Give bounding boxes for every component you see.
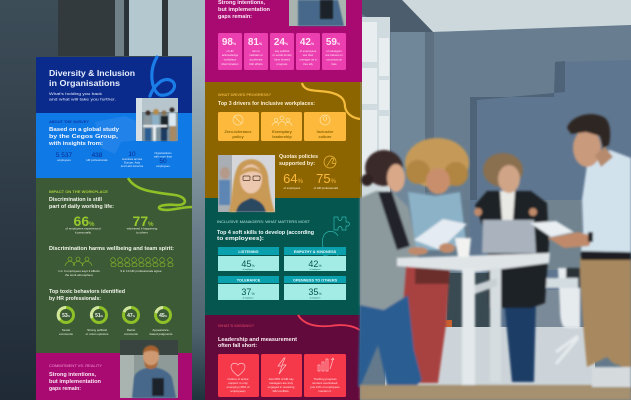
- donut: 53%: 53%: [62, 313, 71, 319]
- skill card: openness to others: OPENNESS TO OTHERS: [293, 278, 338, 282]
- donut: 45%: 45%: [159, 313, 168, 319]
- panel: title header: in Organisations: [49, 78, 120, 88]
- stat card: 98%: [218, 33, 242, 70]
- caption: [58, 269, 100, 277]
- stat: HR professionals: 438: [92, 152, 103, 159]
- donut: 47%: [124, 307, 138, 336]
- stat: HR professionals: [86, 152, 108, 162]
- panel: commitment vs reality, right part: but implementation: [218, 7, 270, 13]
- card: managers resolving conflicts: [261, 354, 302, 397]
- donut: 53%: comments: [59, 332, 73, 336]
- stat: countries: [121, 151, 144, 168]
- donut: 47%: 47%: [127, 313, 136, 319]
- stat: countries: and Latin America: [121, 164, 144, 168]
- section label: COMMITMENT VS. REALITY: [49, 364, 103, 368]
- background photo: dark office wall: [0, 0, 205, 400]
- skill card: tolerance: of employees: [243, 298, 253, 300]
- stat: countries: 10: [128, 151, 136, 158]
- heading: wellbeing: Discrimination harms wellbeing and team spirit:: [49, 246, 174, 252]
- panel: about the survey: with insights from:: [48, 141, 103, 147]
- skill card: listening: 45%: [241, 259, 255, 269]
- section label: IMPACT ON THE WORKPLACE: [49, 190, 109, 194]
- photo: team discussion around standing table: [358, 0, 631, 400]
- stat: 75%: of HR professionals: [314, 186, 339, 190]
- card: tracking progress: remains overlooked:: [312, 381, 338, 385]
- heading: Discrimination is still: [49, 197, 102, 203]
- driver card: exemplary leadership: Exemplary: [272, 129, 293, 134]
- jeans of grey-jacket woman: [358, 295, 422, 387]
- stat card: 42%: manager as a: [299, 58, 317, 62]
- stat: 77%: to others: [136, 230, 148, 234]
- stat: countries: Europe, Asia: [124, 160, 140, 164]
- skill card: tolerance: 37%: [241, 287, 255, 297]
- stat: organisations: [154, 151, 173, 168]
- icon: head with puzzle piece: [321, 217, 350, 259]
- donut: 53%: Sexist: [62, 328, 70, 332]
- heading: Based on a global study: [49, 127, 120, 133]
- stat card: 59%: [322, 33, 346, 70]
- driver card: exemplary leadership: leadership: [272, 134, 292, 139]
- skill card: listening: LISTENING: [238, 250, 259, 254]
- stat: 75%: 75%: [316, 171, 337, 186]
- panel: commitment vs reality, left part: gaps remain:: [49, 386, 81, 392]
- panel: commitment vs reality, right part: [205, 0, 360, 82]
- card: managers resolving conflicts: Just 29% of HR say: [268, 377, 294, 381]
- stat: 64%: 64%: [283, 171, 304, 186]
- donut: 53%: [58, 307, 74, 336]
- panel: what's missing: often fall short:: [218, 343, 257, 349]
- stat: employees: employees: [57, 158, 71, 162]
- skill card: listening: of employees: [243, 269, 253, 271]
- card: culture of active support: [218, 354, 259, 397]
- stat: organisations: 50: [159, 158, 167, 165]
- heading: Top 3 drivers for inclusive workplaces:: [218, 101, 315, 107]
- stat: organisations: Organisations: [154, 151, 172, 155]
- stat card: 42%: of employees: [300, 49, 317, 53]
- skill card: empathy and kindness: EMPATHY & KINDNESS: [294, 250, 337, 254]
- stat card: 81%: 81%: [248, 37, 263, 48]
- card: culture of active support: employees): [231, 389, 246, 393]
- icon: blue ribbon swirl: [150, 57, 175, 96]
- stat: 66%: it personally: [75, 230, 92, 234]
- chair: [545, 268, 580, 364]
- icon: red ribbon: [298, 315, 360, 330]
- stat card: 81%: maintain or: [249, 53, 263, 57]
- driver card: zero-tolerance: Zero-tolerance: [224, 129, 252, 134]
- stat: 66%: [65, 213, 101, 234]
- laptop: [482, 220, 536, 253]
- donut: 51%: 51%: [95, 313, 104, 319]
- stat: organisations: with more than: [154, 154, 173, 158]
- panel: inclusive managers: to employees):: [217, 236, 264, 242]
- section label: ABOUT THE SURVEY: [49, 120, 90, 124]
- person: woman in grey jacket: [360, 150, 418, 313]
- panel: inclusive managers: [205, 198, 360, 315]
- caption: 9 in 10 HR professionals agree: [120, 269, 162, 273]
- panel: commitment vs reality, right part: gaps remain:: [218, 14, 252, 20]
- photo: team at standing table: [136, 98, 178, 141]
- stat card: 98%: 98%: [222, 37, 237, 48]
- stat: 66%: 66%: [74, 213, 95, 229]
- panel: what drives progress: supported by:: [279, 161, 315, 167]
- donut: 45%: based judgments: [150, 332, 173, 336]
- panel: about the survey: [36, 113, 192, 178]
- paper left: [414, 219, 467, 250]
- card: culture of active support: support: is only: [228, 381, 248, 385]
- panel: title header: [36, 57, 192, 113]
- driver card: inclusive culture: [304, 112, 346, 141]
- driver card: zero-tolerance: policy: [232, 134, 244, 139]
- stat: countries: countries across: [122, 157, 143, 161]
- stat card: 59%: of managers: [326, 49, 342, 53]
- driver card: inclusive culture: culture: [319, 134, 332, 139]
- stat card: 59%: are trained on: [325, 53, 343, 57]
- donut: 45%: Appearance-: [152, 328, 170, 332]
- driver card: zero-tolerance: [218, 112, 259, 141]
- stat: 66%: of employees experienced: [65, 226, 101, 230]
- panel: commitment vs reality, left part: but implementation: [49, 379, 101, 385]
- card: tracking progress: just 21% of employees: [309, 385, 340, 389]
- panel: what's missing: [205, 315, 360, 400]
- skill card: tolerance: TOLERANCE: [237, 278, 261, 282]
- stat card: 98%: acknowledge: [222, 53, 239, 57]
- subtitle: What's holding you back: [49, 91, 102, 96]
- stat: 77%: [127, 213, 158, 234]
- stat: 75%: [314, 171, 339, 190]
- person: man in white shirt: [548, 114, 631, 370]
- stat: 64%: of employees: [284, 186, 301, 190]
- driver card: inclusive culture: Inclusive: [317, 129, 334, 134]
- stat card: 42%: [296, 33, 320, 70]
- card: culture of active support: Culture of active: [228, 377, 249, 381]
- stat card: 59%: unconscious: [326, 58, 342, 62]
- skill card: openness to others: 35%: [308, 287, 322, 297]
- skill card: listening: [218, 247, 279, 271]
- stat: employees: 5 537: [56, 152, 73, 159]
- stat card: 98%: discrimination: [221, 62, 239, 66]
- stat card: 24%: 24%: [274, 37, 289, 48]
- stat: employees: [56, 152, 73, 162]
- stat: HR professionals: HR professionals: [86, 158, 108, 162]
- stat card: 42%: 42%: [300, 37, 315, 48]
- card: managers resolving conflicts: D&I conflicts.: [273, 389, 290, 393]
- photo: woman with glasses: [218, 155, 275, 212]
- donut: 51%: [86, 307, 109, 336]
- card: tracking progress: Tracking progress: [313, 377, 337, 381]
- card: managers resolving conflicts: managers are truly: [269, 381, 294, 385]
- panel: impact on the workplace: part of daily working life:: [49, 204, 114, 210]
- stat card: 98%: workplace: [224, 58, 237, 62]
- panel: impact on the workplace: by HR professionals:: [49, 296, 101, 302]
- skill card: openness to others: [284, 276, 346, 300]
- icon: green ribbon: [128, 178, 192, 210]
- stat card: 42%: see their: [303, 53, 313, 57]
- heading: title: Diversity & Inclusion: [49, 68, 135, 78]
- icon: yellow ribbon: [302, 83, 360, 119]
- heading: quotas: Quotas policies: [279, 154, 318, 160]
- heading: Strong intentions,: [49, 372, 96, 378]
- card: culture of active support: emerging (46% of: [227, 385, 250, 389]
- panel: about the survey: by the Cegos Group,: [49, 134, 118, 140]
- donut: 51%: or union opinions: [86, 332, 109, 336]
- stat card: 42%: true ally: [303, 62, 313, 66]
- stat: 77%: 77%: [133, 213, 154, 229]
- skill card: empathy and kindness: 42%: [308, 259, 322, 269]
- caption: 1 in 3 employees says it affects: [58, 269, 100, 273]
- panel: impact on the workplace: [36, 178, 192, 353]
- section label: WHAT DRIVES PROGRESS?: [218, 93, 271, 97]
- donut: 51%: Strong political: [87, 328, 107, 332]
- stat card: 59%: bias: [331, 62, 337, 66]
- icon: nine people: [111, 258, 173, 266]
- skill card: openness to others: of employees: [310, 298, 320, 300]
- stat card: 98%: of HR: [226, 49, 234, 53]
- stat card: 24%: say political: [275, 49, 290, 53]
- driver card: exemplary leadership: [261, 112, 302, 141]
- card: managers resolving conflicts: engaged in resolving: [268, 385, 295, 389]
- paper right: [530, 221, 574, 237]
- skill card: empathy and kindness: of employees: [310, 269, 320, 271]
- person: woman with curly hair: [398, 138, 469, 383]
- coffee cup: [455, 238, 471, 257]
- stat card: 24%: have slowed: [274, 58, 290, 62]
- panel: what drives progress: [205, 82, 360, 198]
- heading: Leadership and measurement: [218, 337, 297, 343]
- photo: man, lower portion: [289, 0, 346, 26]
- stat card: 59%: 59%: [326, 37, 341, 48]
- photo: smiling man with tablet: [120, 340, 178, 398]
- hands holding paper: [408, 243, 455, 255]
- office room background: [360, 0, 631, 400]
- skill card: tolerance: [218, 276, 279, 300]
- donut: 47%: Racist: [127, 328, 135, 332]
- stat card: 24%: [270, 33, 294, 70]
- stat card: 81%: [244, 33, 268, 70]
- stat card: 24%: progress: [277, 62, 288, 66]
- stat card: 24%: or social trends: [273, 53, 292, 57]
- donut: 47%: comments: [124, 332, 138, 336]
- blurred foreground table: [360, 385, 631, 400]
- standing table: [397, 253, 550, 386]
- heading: Top 4 soft skills to develop (according: [217, 230, 314, 236]
- card: tracking progress: mention it.: [318, 389, 332, 393]
- skill card: empathy and kindness: [284, 247, 346, 271]
- heading: Strong intentions,: [218, 0, 265, 6]
- section label: WHAT'S MISSING?: [218, 324, 254, 328]
- panel: title header: and what will take you further.: [49, 96, 116, 102]
- person: woman in black jacket: [474, 153, 549, 382]
- section label: INCLUSIVE MANAGERS: WHAT MATTERS MOST: [217, 220, 310, 224]
- card: tracking progress: [304, 354, 346, 397]
- donut: 45%: [150, 308, 173, 336]
- stat card: 81%: accelerate: [250, 58, 263, 62]
- stat: organisations: employees: [156, 164, 170, 168]
- caption: the work atmosphere: [65, 273, 93, 277]
- stat card: 81%: aim to: [252, 49, 260, 53]
- heading: toxic behaviours: Top toxic behaviors identified: [49, 289, 125, 295]
- icon: thumbs badge: [324, 156, 336, 168]
- stat: 77%: witnessed it happening: [127, 226, 158, 230]
- stat card: 81%: D&I efforts: [249, 62, 263, 66]
- icon: three people: [65, 257, 92, 266]
- panel: commitment vs reality, left part: [36, 353, 192, 400]
